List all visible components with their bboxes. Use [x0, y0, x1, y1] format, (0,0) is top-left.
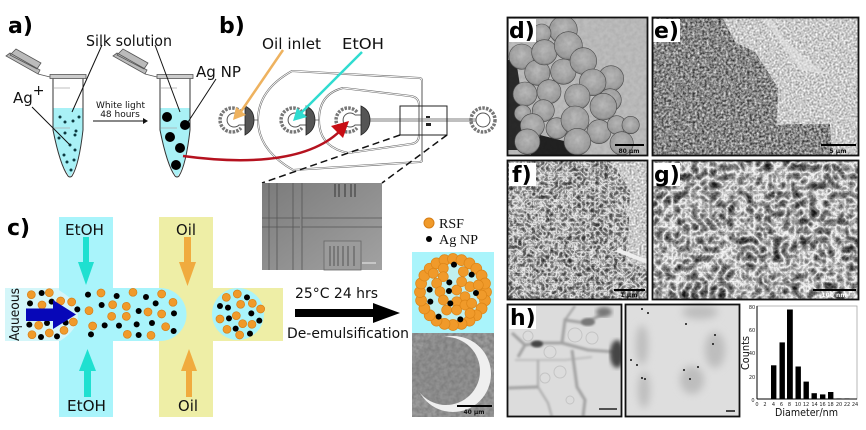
panel h left: TEM fibrils [507, 304, 624, 417]
text: oil top: Oil [176, 221, 196, 239]
x tick labels: 2 [763, 402, 767, 408]
chart frame [757, 306, 857, 399]
scale text: 1 µm [621, 292, 637, 299]
label c: c) [7, 216, 30, 241]
y tick labels [749, 305, 755, 404]
label a: a) [8, 14, 33, 39]
y tick labels: 40 [749, 351, 755, 357]
text: aqueous: Aqueous [8, 288, 23, 341]
panel d: SEM spheres [507, 16, 648, 156]
arrow: EtOH bottom [79, 349, 96, 397]
label f: f) [512, 163, 532, 188]
particles [26, 288, 265, 340]
inlets and outlet [220, 106, 495, 135]
droplet [212, 288, 264, 340]
label e: e) [654, 19, 679, 44]
x tick labels: 18 [827, 402, 834, 408]
zoom box [400, 106, 447, 135]
x tick labels: 4 [772, 402, 775, 408]
micrograph [262, 183, 382, 270]
scale bar 80 um [615, 144, 644, 146]
panel labels d-h [509, 19, 680, 331]
x tick labels: 10 [795, 402, 801, 408]
text: de-emulsification: De-emulsification [287, 326, 409, 342]
x tick labels: 24 [852, 402, 858, 408]
text: oil bottom: Oil [178, 397, 198, 415]
arrow: oil top [179, 237, 196, 286]
scale bar 5 um [821, 144, 856, 146]
arrow: aqueous flow [26, 300, 76, 329]
SEM of microparticle [412, 333, 494, 417]
y axis title: Counts [739, 336, 752, 370]
scale bar [813, 289, 856, 291]
label b: b) [219, 14, 245, 39]
x tick labels: 22 [844, 402, 850, 408]
aqueous inlet channel [5, 288, 59, 341]
y tick labels: 60 [749, 328, 755, 334]
text: Ag plus: + [33, 83, 45, 99]
scale bar [726, 410, 735, 412]
aqueous tip [5, 288, 78, 341]
text: white light 48 hours: White light [96, 101, 145, 111]
channels [253, 119, 476, 121]
legend RSF marker [424, 218, 434, 228]
device inner channel [319, 88, 419, 153]
text: conditions: 25°C 24 hrs [295, 286, 378, 302]
arrow: EtOH inlet [293, 52, 362, 121]
EtOH cross channel [59, 217, 113, 417]
tube: silver nanoparticles [113, 49, 193, 177]
zoom box marks [426, 116, 431, 126]
tube: silk solution with Ag+ [6, 49, 86, 177]
arrow: tube to tube [93, 118, 148, 124]
panel b: microfluidic device [183, 14, 495, 270]
text: Ag plus: Ag [13, 89, 33, 107]
histogram: diameter distribution [739, 305, 858, 419]
legend RSF label: RSF [439, 216, 465, 231]
legend Ag NP marker [426, 236, 432, 242]
legend: RSF and Ag NP [424, 216, 478, 247]
y tick labels: 80 [749, 305, 755, 311]
panel g: fibre network close-up [652, 160, 859, 300]
scale text: 100 nm [821, 292, 847, 299]
scale bar 1 um [614, 289, 645, 291]
x axis title: Diameter/nm [775, 406, 838, 419]
leader lines [32, 45, 216, 145]
scale text: 40 µm [463, 409, 485, 416]
x tick labels: 20 [836, 402, 842, 408]
scale text: 5 µm [830, 148, 846, 155]
panel f: fibre network [507, 160, 648, 300]
x tick labels: 12 [803, 402, 809, 408]
x tick labels: 6 [780, 402, 783, 408]
text: Ag NP: Ag NP [196, 63, 241, 81]
dashed zoom lines [262, 135, 447, 183]
image frames [508, 18, 858, 416]
scale text: 80 µm [618, 148, 640, 155]
label d: d) [509, 19, 535, 44]
scale bar 40 um [457, 405, 492, 407]
x tick labels [755, 402, 858, 408]
text: silk solution: Silk solution [86, 32, 172, 50]
device outer channel [258, 71, 422, 170]
jet [59, 288, 186, 341]
text: 48 hours: 48 hours [100, 110, 140, 120]
label h: h) [510, 306, 536, 331]
arrow: oil bottom [181, 349, 197, 397]
text: EtOH bottom: EtOH [67, 397, 106, 415]
text: EtOH top: EtOH [65, 221, 104, 239]
panel e: SEM surface [652, 17, 859, 156]
y tick labels: 0 [751, 398, 755, 404]
x tick labels: 0 [755, 402, 759, 408]
microparticle schematic [412, 252, 494, 333]
x tick labels: 16 [819, 402, 826, 408]
scale bar [599, 408, 617, 410]
arrow: de-emulsification [295, 303, 400, 323]
text: EtOH: EtOH [342, 35, 384, 53]
bars [763, 310, 850, 399]
text: oil inlet: Oil inlet [262, 35, 321, 53]
label g: g) [654, 163, 680, 188]
arrow: EtOH top [78, 237, 94, 285]
oil cross channel [159, 217, 283, 417]
panel c: droplet generation [5, 216, 409, 417]
panel a: photoreduction in tubes [6, 14, 241, 177]
arrow: oil inlet [233, 50, 283, 120]
x tick labels: 8 [788, 402, 791, 408]
y tick labels: 20 [749, 375, 755, 381]
x axis [757, 398, 857, 400]
arrow: red aqueous inlet [183, 121, 349, 160]
legend Ag NP label: Ag NP [439, 232, 478, 247]
y axis [756, 306, 758, 399]
x tick labels: 14 [811, 402, 818, 408]
panel h middle: TEM with nanoparticles [625, 304, 740, 417]
